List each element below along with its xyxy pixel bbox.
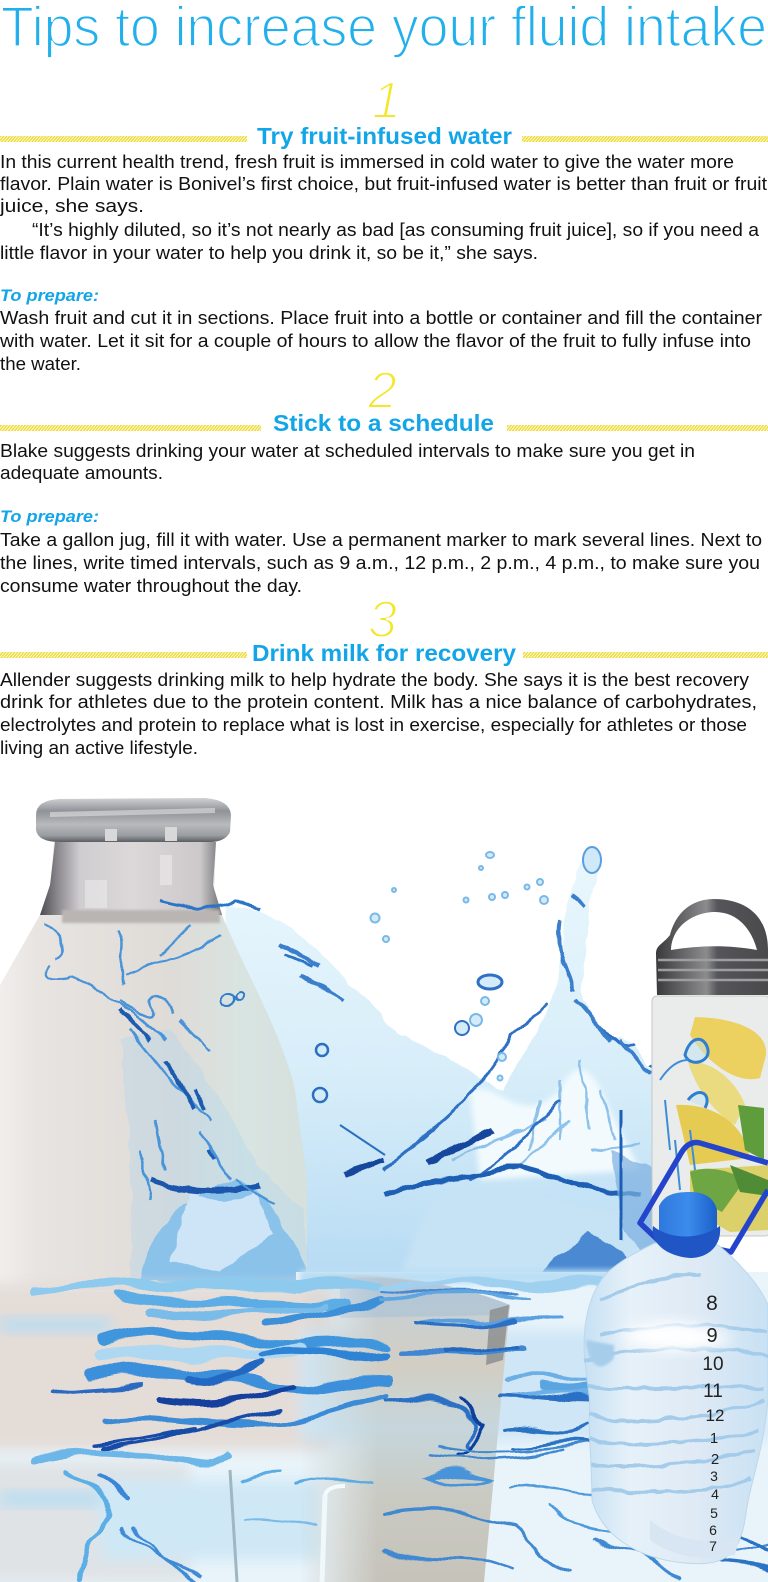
preparation text 1: Wash fruit and cut it in sections. Place fruit into a bottle or container and fill the container: [0, 307, 762, 328]
body text 1: [0, 151, 767, 263]
jug hour marks: 10: [702, 1354, 724, 1375]
jug hour marks: 1: [710, 1430, 718, 1447]
heading 2: Stick to a schedule: [273, 410, 494, 436]
preparation text 2: [0, 529, 762, 596]
water surface floor: [0, 1270, 768, 1582]
preparation text 2: consume water throughout the day.: [0, 575, 302, 596]
number 1: 1: [372, 72, 401, 130]
number 2: 2: [367, 362, 397, 420]
jug hour marks: [702, 1292, 724, 1554]
to prepare label 2: To prepare:: [0, 507, 99, 526]
jug hour marks: 12: [706, 1406, 724, 1425]
heading 3: Drink milk for recovery: [252, 640, 516, 666]
body text 2: adequate amounts.: [0, 462, 163, 483]
body text 3: drink for athletes due to the protein content. Milk has a nice balance of carbohydrates,: [0, 691, 757, 712]
jug hour marks: 5: [710, 1505, 718, 1521]
illustration: water splash scene: [0, 798, 768, 1582]
jug hour marks: 6: [709, 1522, 717, 1538]
body text 1: juice, she says.: [0, 195, 144, 216]
heading 1: Try fruit-infused water: [257, 123, 512, 149]
jug hour marks: 7: [709, 1538, 717, 1554]
jug cap: [653, 1192, 720, 1258]
number 3: 3: [368, 591, 397, 649]
water splash behind bottle: [225, 850, 705, 1275]
plastic water jug: [584, 1192, 768, 1564]
body text 3: electrolytes and protein to replace what is lost in exercise, especially for athletes or those: [0, 714, 747, 735]
jug hour marks: 8: [706, 1292, 718, 1315]
preparation text 1: the water.: [0, 353, 81, 374]
preparation text 1: with water. Let it sit for a couple of hours to allow the flavor of the fruit to fully infuse into: [0, 330, 751, 351]
milk glass: [230, 1274, 510, 1582]
body text 1: little flavor in your water to help you drink it, so be it,” she says.: [0, 242, 538, 263]
jug hour marks: 11: [703, 1381, 723, 1402]
jug hour marks: 9: [706, 1325, 718, 1347]
body text 2: [0, 440, 695, 483]
water ripples: [30, 1283, 768, 1580]
preparation text 2: the lines, write timed intervals, such as 9 a.m., 12 p.m., 2 p.m., 4 p.m., to make sure you: [0, 552, 760, 573]
section 3: drink milk for recovery: [0, 591, 768, 758]
body text 3: Allender suggests drinking milk to help hydrate the body. She says it is the best recovery: [0, 669, 750, 690]
preparation text 1: [0, 307, 762, 374]
body text 1: In this current health trend, fresh fruit is immersed in cold water to give the water more: [0, 151, 734, 172]
section 1: try fruit-infused water: [0, 72, 768, 374]
water droplets: [313, 847, 601, 1155]
jug hour marks: 2: [711, 1451, 719, 1468]
jug hour marks: 4: [711, 1486, 719, 1502]
jug hour marks: 3: [710, 1468, 718, 1484]
to prepare label 1: To prepare:: [0, 286, 99, 305]
blue jug handle: [640, 1142, 768, 1252]
section 2: stick to a schedule: [0, 362, 768, 596]
divider stripes 3: [0, 652, 768, 658]
body text 1: “It’s highly diluted, so it’s not nearly as bad [as consuming fruit juice], so if you need a: [32, 219, 760, 240]
body text 3: living an active lifestyle.: [0, 737, 198, 758]
divider stripes 1: [0, 136, 768, 142]
preparation text 2: Take a gallon jug, fill it with water. Use a permanent marker to mark several lines. Next to: [0, 529, 762, 550]
fruit infused bottle: [652, 899, 768, 1236]
milk bottle: [0, 798, 307, 1300]
divider stripes 2: [0, 425, 768, 431]
water over bottle: [43, 900, 313, 1290]
body text 2: Blake suggests drinking your water at scheduled intervals to make sure you get in: [0, 440, 695, 461]
body text 3: [0, 669, 757, 758]
body text 1: flavor. Plain water is Bonivel’s first choice, but fruit-infused water is better than fruit or fruit: [0, 173, 767, 194]
